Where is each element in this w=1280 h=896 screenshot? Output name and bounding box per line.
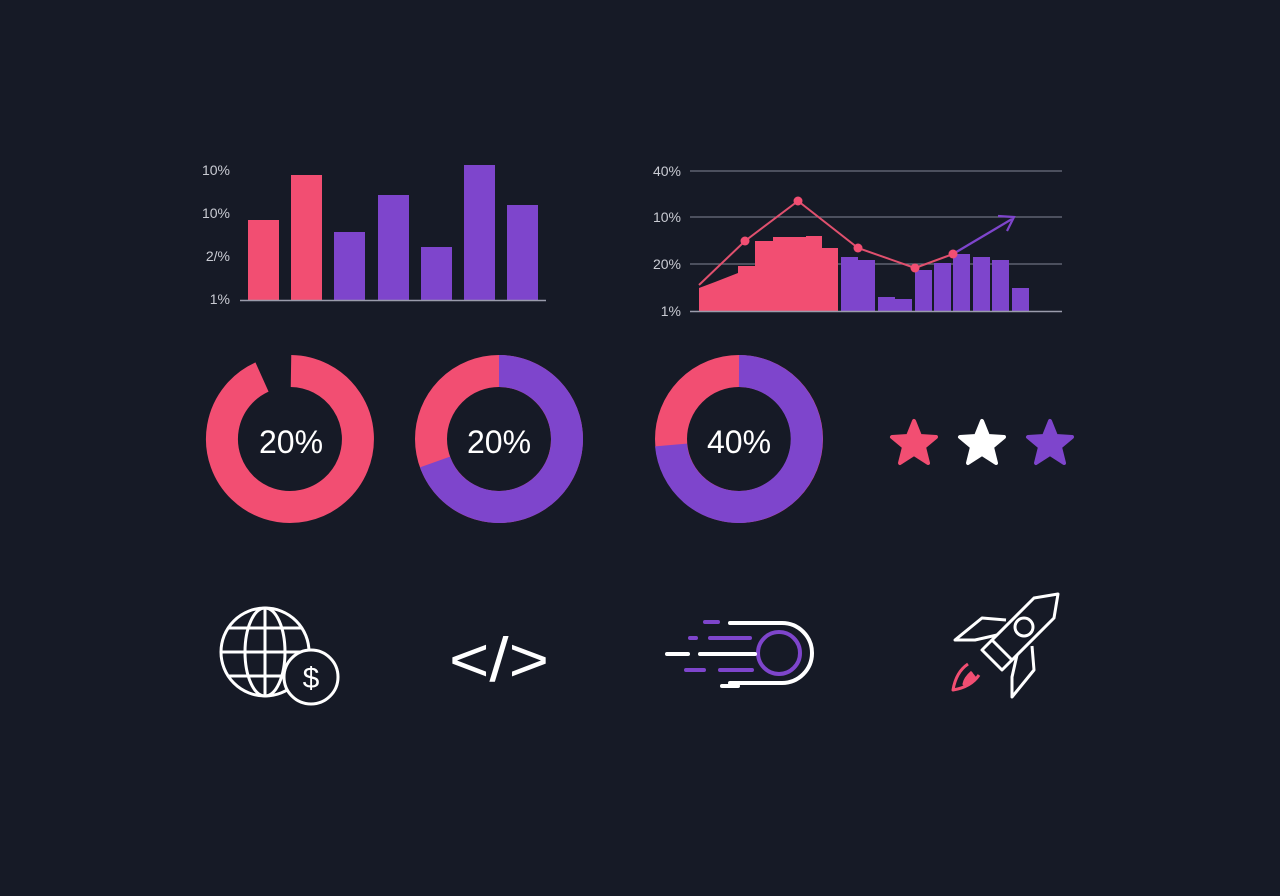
donut 2: 20% [431,371,567,507]
donut 1: 20%: 20% [259,424,323,460]
icon: rocket [953,594,1058,697]
combo chart: right: 10% [653,209,681,225]
combo chart: right: 40% [653,163,681,179]
bar chart: left: 10% [202,205,230,221]
combo chart: right [653,163,1062,319]
stars [892,421,1072,463]
donut 3: 40% [671,371,807,507]
combo chart: right: 20% [653,256,681,272]
icon: speeding circle [667,622,812,686]
icon: globe with dollar: $ [303,662,320,695]
icon: code: </> [449,626,549,695]
donut 1: 20% [222,371,358,507]
combo chart: right: 1% [661,303,681,319]
bar chart: left: 10% [202,162,230,178]
bar chart: left [202,162,546,307]
bar chart: left: 2/% [206,248,230,264]
bar chart: left: 1% [210,291,230,307]
donut 2: 20%: 20% [467,424,531,460]
icon: globe with dollar [221,608,338,704]
donut 3: 40%: 40% [707,424,771,460]
